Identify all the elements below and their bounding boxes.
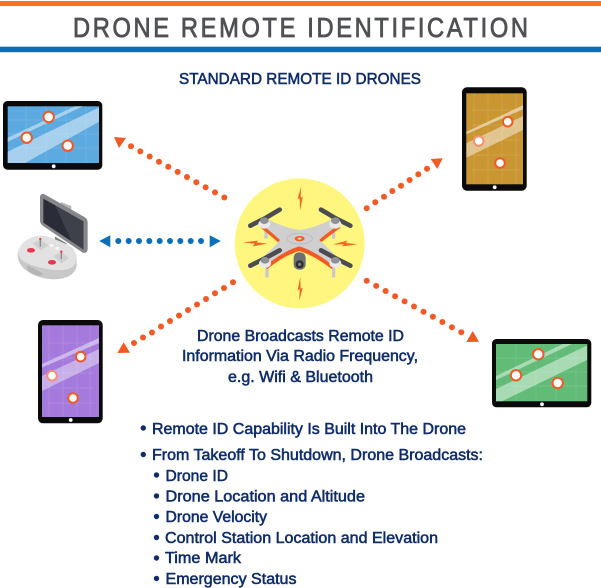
bullet list: remote ID details: Drone Velocity bbox=[166, 509, 267, 526]
icon: green landscape tablet bbox=[492, 339, 591, 407]
bullet list: remote ID details: Drone ID bbox=[166, 468, 228, 485]
caption: broadcast description bbox=[182, 328, 418, 386]
bullet list: remote ID details: Emergency Status bbox=[166, 571, 296, 588]
bullet list: remote ID details bbox=[141, 421, 483, 588]
bullet list: remote ID details: Time Mark bbox=[165, 550, 242, 567]
arrow: to green tablet bbox=[364, 278, 479, 342]
header band bbox=[0, 1, 601, 53]
icon: gold portrait tablet bbox=[462, 87, 527, 191]
icon: remote controller bbox=[18, 194, 88, 279]
arrow: to purple tablet bbox=[117, 279, 236, 353]
bullet list: remote ID details: Drone Location and Altitude bbox=[166, 488, 365, 506]
bullet list: remote ID details: Control Station Location and Elevation bbox=[165, 530, 438, 547]
caption: broadcast description: Information Via Radio Frequency, bbox=[182, 348, 418, 365]
subtitle: STANDARD REMOTE ID DRONES bbox=[179, 71, 421, 88]
arrow: to blue tablet bbox=[114, 137, 227, 200]
caption: broadcast description: e.g. Wifi & Bluetooth bbox=[228, 369, 373, 386]
bullet list: remote ID details: From Takeoff To Shutdown, Drone Broadcasts: bbox=[152, 447, 483, 464]
icon: blue landscape tablet bbox=[3, 101, 102, 170]
title: DRONE REMOTE IDENTIFICATION bbox=[73, 13, 528, 43]
icon: drone in yellow circle bbox=[235, 178, 365, 308]
icon: purple portrait tablet bbox=[38, 320, 103, 423]
bullet list: remote ID details: Remote ID Capability Is Built Into The Drone bbox=[152, 421, 466, 438]
caption: broadcast description: Drone Broadcasts Remote ID bbox=[197, 328, 404, 345]
arrow: two-way controller link bbox=[99, 235, 221, 247]
arrow: to gold tablet bbox=[364, 158, 443, 211]
